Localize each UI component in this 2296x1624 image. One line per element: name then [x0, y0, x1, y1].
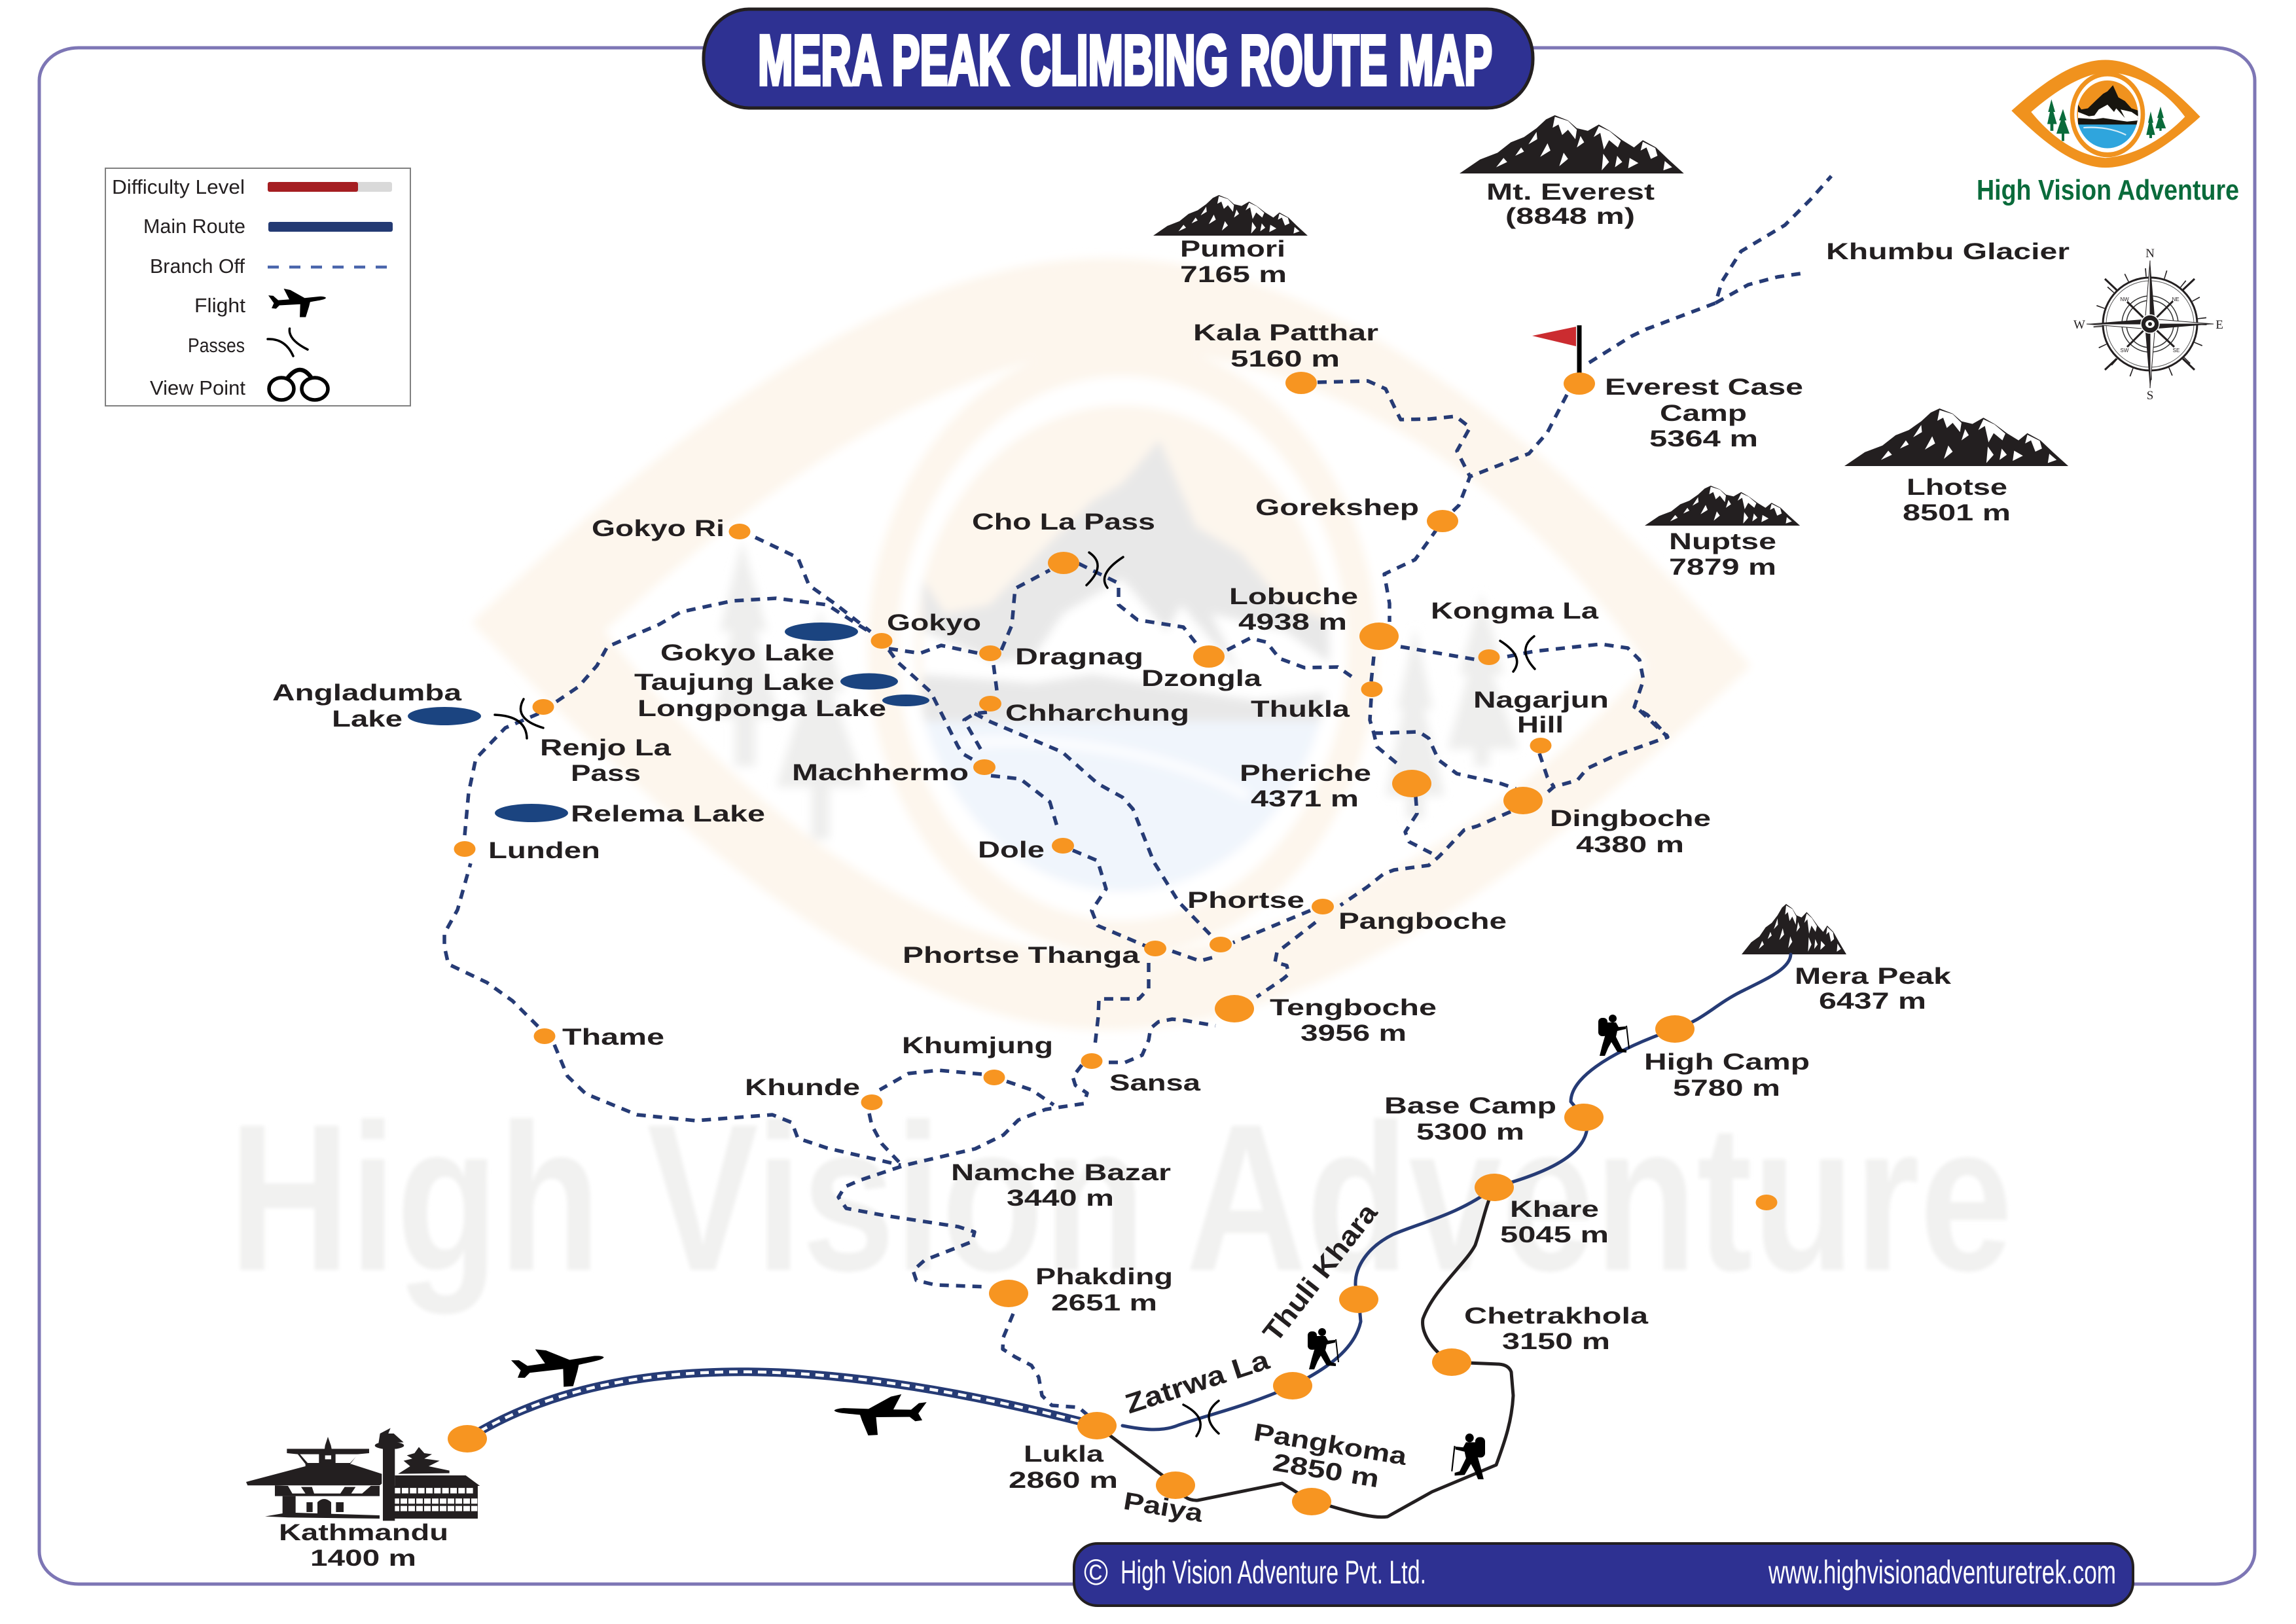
label: Pheriche: 4371 m [1251, 786, 1359, 812]
label: Kathmandu: Kathmandu [279, 1520, 448, 1545]
airplane icon: outbound [511, 1344, 605, 1390]
label: Phortse Thanga: Phortse Thanga [903, 943, 1140, 968]
label: Namche Bazar: 3440 m [1007, 1185, 1114, 1211]
label: Pumori [1180, 236, 1287, 287]
label: Dragnag: Dragnag [1015, 644, 1143, 670]
label: Kala Patthar: Kala Patthar [1193, 320, 1379, 346]
label: Mt. Everest: Mt. Everest [1486, 179, 1655, 205]
label: Cho La Pass: Cho La Pass [972, 509, 1155, 535]
label: Kathmandu: 1400 m [310, 1545, 416, 1571]
footer company name: High Vision Adventure Pvt. Ltd. [1121, 1554, 1426, 1591]
label: Lobuche: Lobuche [1229, 584, 1358, 609]
label: Angladumba Lake [272, 680, 462, 732]
label: Tengboche: Tengboche [1270, 995, 1437, 1020]
label: Dingboche [1550, 806, 1711, 857]
label: Longponga Lake: Longponga Lake [637, 696, 886, 721]
label: Gokyo: Gokyo [887, 610, 981, 636]
lakes [408, 623, 929, 822]
label: Khare: 5045 m [1500, 1222, 1609, 1248]
pass symbols: Cho La [1086, 552, 1123, 588]
label: Angladumba Lake: Lake [332, 706, 403, 732]
label: Tengboche [1270, 995, 1437, 1046]
logo wordmark: High Vision Adventure [1977, 174, 2239, 206]
label: High Camp: High Camp [1644, 1049, 1810, 1075]
label: Lobuche: 4938 m [1238, 609, 1347, 635]
label: Namche Bazar: Namche Bazar [951, 1160, 1172, 1185]
footer copyright symbol: © [1084, 1551, 1108, 1593]
main route (solid blue) [1122, 954, 1791, 1430]
label: Kala Patthar [1193, 320, 1379, 372]
footer website: www.highvisionadventuretrek.com [1768, 1554, 2116, 1591]
label: Dzongla: Dzongla [1141, 666, 1262, 691]
compass rose: W [2073, 318, 2085, 332]
alternate route (solid black) [1097, 1187, 1513, 1517]
label: Renjo La Pass: Pass [571, 761, 641, 786]
compass rose: NW [2120, 297, 2129, 302]
label: Lunden: Lunden [488, 838, 600, 863]
label: Khunde: Khunde [745, 1075, 860, 1100]
label: Mera Peak: 6437 m [1819, 988, 1926, 1014]
pass symbols: Renjo La [495, 699, 543, 738]
label: Nagarjun Hill: Hill [1517, 712, 1564, 738]
label: High Camp: 5780 m [1673, 1075, 1780, 1101]
hiker icon: Pangkoma [1452, 1434, 1485, 1479]
label: Thukla: Thukla [1251, 696, 1350, 722]
watermark: eye logo [471, 258, 1751, 1030]
compass rose: NE [2172, 297, 2179, 302]
label: Renjo La Pass [540, 735, 672, 786]
legend: difficulty level [112, 175, 392, 198]
label: Base Camp [1384, 1093, 1556, 1145]
label: Mera Peak: Mera Peak [1795, 964, 1952, 989]
label: Lhotse: 8501 m [1903, 500, 2011, 526]
Kathmandu temple silhouette [246, 1428, 480, 1521]
label: Khare: Khare [1510, 1197, 1599, 1222]
legend: main route [143, 215, 393, 238]
label: Namche Bazar [951, 1160, 1172, 1211]
legend: difficulty level: Difficulty Level [112, 175, 245, 198]
mountain icon: Mera Peak [1742, 904, 1846, 954]
label: Sansa: Sansa [1109, 1070, 1201, 1096]
label: Pangkoma [1252, 1418, 1409, 1493]
label: Khare [1500, 1197, 1609, 1248]
label: Gokyo Lake: Gokyo Lake [660, 640, 834, 666]
label: Zatrwa La: Zatrwa La [1121, 1344, 1273, 1420]
compass rose: S [2147, 389, 2153, 403]
label: Taujung Lake: Taujung Lake [634, 670, 834, 695]
title banner [704, 9, 1533, 108]
label: Thuli Khara: Thuli Khara [1257, 1197, 1384, 1348]
label: Everest Case Camp [1605, 374, 1803, 452]
legend: passes: Passes [188, 334, 245, 357]
label: Nuptse: 7879 m [1669, 554, 1776, 580]
compass rose [2073, 247, 2223, 403]
legend: main route: Main Route [143, 215, 245, 238]
mountain icon: Lhotse [1844, 408, 2068, 466]
waypoint markers [448, 372, 1778, 1515]
label: Base Camp: 5300 m [1416, 1119, 1524, 1145]
legend: flight [194, 289, 326, 317]
label: Pangkoma: 2850 m [1271, 1449, 1381, 1493]
flight route Kathmandu to Lukla [467, 1372, 1097, 1439]
legend: view point: View Point [150, 376, 245, 399]
label: Nagarjun Hill: Nagarjun [1473, 687, 1609, 713]
label: Dingboche: Dingboche [1550, 806, 1711, 831]
label: Dole: Dole [978, 837, 1045, 863]
label: Mera Peak [1795, 964, 1952, 1014]
airplane icon: return [834, 1393, 928, 1437]
label: Thame: Thame [562, 1024, 664, 1050]
label: Lukla [1009, 1441, 1118, 1493]
label: Phortse: Phortse [1187, 888, 1304, 913]
legend panel [105, 168, 410, 406]
label: Kongma La: Kongma La [1431, 598, 1599, 624]
label: Paiya: Paiya [1122, 1487, 1206, 1528]
compass rose: N [2145, 247, 2155, 261]
label: Base Camp: Base Camp [1384, 1093, 1556, 1119]
label: Gokyo Ri: Gokyo Ri [592, 516, 725, 541]
legend: branch off: Branch Off [150, 255, 245, 278]
compass rose: SE [2173, 348, 2179, 353]
pass symbols: Kongma La [1500, 636, 1535, 672]
title text: MERA PEAK CLIMBING ROUTE MAP [758, 20, 1492, 99]
label: Pheriche [1240, 761, 1371, 812]
label: Nuptse [1669, 529, 1776, 580]
label: Kathmandu [279, 1520, 448, 1571]
label: Phakding: 2651 m [1051, 1290, 1157, 1316]
label: Machhermo: Machhermo [792, 760, 969, 785]
label: Lhotse [1903, 475, 2011, 526]
label: Lukla: Lukla [1024, 1441, 1104, 1467]
label: Angladumba Lake: Angladumba [272, 680, 462, 706]
label: Gorekshep: Gorekshep [1255, 495, 1419, 520]
label: Mt. Everest: (8848 m) [1505, 204, 1635, 229]
label: Nuptse: Nuptse [1669, 529, 1776, 554]
label: Tengboche: 3956 m [1300, 1020, 1407, 1046]
mountain icon: Nuptse [1645, 486, 1800, 526]
legend: view point [150, 370, 328, 400]
mountain icon: Pumori [1153, 195, 1308, 236]
label: Pangboche: Pangboche [1338, 909, 1507, 934]
label: Lukla: 2860 m [1009, 1468, 1118, 1493]
label: Chharchung: Chharchung [1005, 700, 1189, 726]
branch trails (dashed) [444, 176, 1831, 1416]
label: Khumjung: Khumjung [902, 1033, 1053, 1058]
company logo [1977, 60, 2239, 206]
legend: flight: Flight [194, 294, 245, 317]
hiker icon: Zatrwa La [1308, 1328, 1338, 1369]
hiker icon: High Camp [1598, 1015, 1629, 1056]
label: Lobuche [1229, 584, 1358, 635]
label: Lhotse: Lhotse [1907, 475, 2007, 500]
label: Pheriche: Pheriche [1240, 761, 1371, 786]
label: Pangkoma: Pangkoma [1252, 1418, 1409, 1471]
compass rose: E [2215, 318, 2223, 332]
label: Renjo La Pass: Renjo La [540, 735, 672, 761]
legend: passes [188, 329, 308, 357]
compass rose: SW [2121, 348, 2129, 353]
label: Everest Case Camp: Everest Case [1605, 374, 1803, 400]
flag at Everest Base Camp [1532, 325, 1579, 373]
label: Kala Patthar: 5160 m [1230, 346, 1340, 372]
label: Phakding [1035, 1264, 1173, 1316]
label: Nagarjun Hill [1473, 687, 1609, 738]
label: Relema Lake: Relema Lake [571, 801, 765, 827]
label: Dingboche: 4380 m [1576, 832, 1684, 857]
label: Chetrakhola [1464, 1303, 1649, 1354]
footer banner [1074, 1543, 2133, 1606]
label: Mt. Everest [1486, 179, 1655, 229]
label: Pumori: 7165 m [1180, 262, 1287, 287]
label: Chetrakhola: 3150 m [1502, 1329, 1610, 1354]
label: Chetrakhola: Chetrakhola [1464, 1303, 1649, 1329]
label: Pumori: Pumori [1180, 236, 1285, 262]
label: Phakding: Phakding [1035, 1264, 1173, 1290]
label: Everest Case Camp: 5364 m [1649, 426, 1758, 452]
pass symbols: Zatrwa La [1183, 1401, 1219, 1436]
label: High Camp [1644, 1049, 1810, 1101]
mountain icon: Mt. Everest [1460, 115, 1684, 173]
label: Everest Case Camp: Camp [1660, 401, 1747, 426]
label: Khumbu Glacier: Khumbu Glacier [1826, 239, 2070, 264]
